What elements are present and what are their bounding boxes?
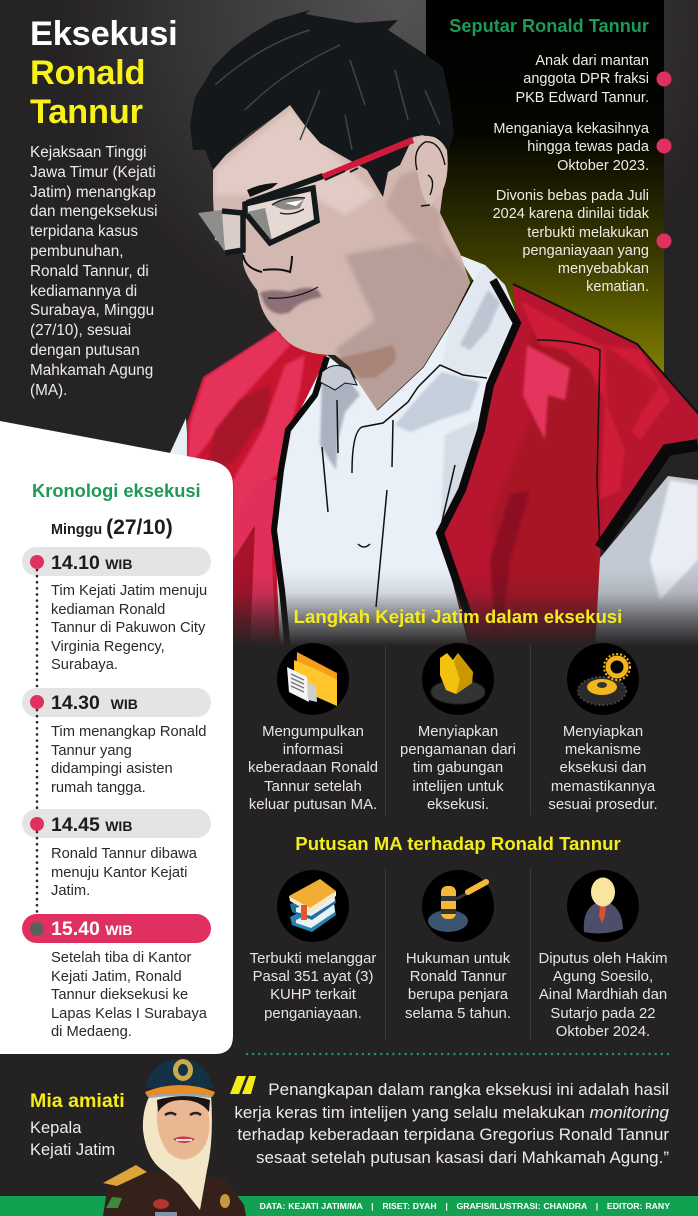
quote text: kerja keras tim intelijen yang selalu melakukan monitoring [234, 1103, 669, 1122]
text: langkah 1 [248, 724, 378, 813]
text: langkah 1: informasi [283, 742, 343, 758]
hijab [143, 1095, 212, 1210]
portrait: Ronald Tannur [170, 10, 698, 650]
timeline text 1: Virginia Regency, [51, 638, 165, 654]
intro text: terpidana kasus [30, 223, 138, 240]
timeline markers [30, 555, 44, 936]
background [0, 0, 698, 650]
text: langkah 2: tim gabungan [413, 760, 503, 776]
quote mark [230, 1076, 256, 1094]
text: putusan 3: Oktober 2024. [556, 1024, 650, 1040]
timeline text 3 [51, 846, 197, 899]
text: Seputar fact 2 [493, 121, 649, 174]
text: Seputar fact 1 [515, 53, 649, 106]
text: Seputar fact 3: penganiayaan yang [522, 243, 649, 259]
heading: Putusan MA: Putusan MA terhadap Ronald Tannur [295, 833, 621, 854]
text: Seputar fact 3 [493, 188, 649, 295]
icon: folder with documents [277, 643, 349, 715]
glasses [198, 140, 413, 253]
panel: kronologi card [0, 421, 233, 1054]
text: Seputar fact 2: Oktober 2023. [557, 158, 649, 174]
timeline text 4: Tannur dieksekusi ke [51, 987, 188, 1003]
text: Seputar fact 1: PKB Edward Tannur. [515, 90, 649, 106]
title: Ronald [30, 54, 145, 92]
neck and face [213, 105, 470, 410]
timeline text 1 [51, 583, 207, 673]
title [30, 15, 178, 131]
right jacket [440, 284, 698, 650]
intro text [30, 144, 158, 399]
timeline text 4: Kejati Jatim, Ronald [51, 968, 182, 984]
title: Tannur [30, 93, 143, 131]
text: putusan 2 [405, 951, 511, 1022]
quote text: Penangkapan dalam rangka eksekusi ini adalah hasil [268, 1080, 669, 1099]
text: langkah 2: pengamanan dari [400, 742, 516, 758]
speaker name: Mia amiati [30, 1090, 125, 1112]
cap [146, 1059, 213, 1088]
time: 14.30: 14.30 WIB [51, 692, 138, 714]
text: Seputar fact 3: kematian. [586, 279, 649, 295]
heading: Kronologi eksekusi: Kronologi eksekusi [32, 480, 201, 501]
uniform insignia [106, 1197, 122, 1208]
dots: Seputar bullets [656, 72, 672, 248]
footer credits: DATA: KEJATI JATIM/MA | RISET: DYAH | GRAFIS/ILUSTRASI: CHANDRA | EDITOR: RANY [260, 1201, 670, 1211]
speaker role: Kepala [30, 1119, 81, 1137]
timeline text 2 [51, 724, 206, 796]
timeline text 1: Surabaya. [51, 657, 118, 673]
intro text: kediamannya di [30, 283, 137, 300]
timeline text 1: Tannur di Pakuwon City [51, 620, 205, 636]
intro text: (27/10), sesuai [30, 322, 131, 339]
text: langkah 3: Menyiapkan [563, 724, 643, 740]
text: langkah 3: mekanisme [565, 742, 641, 758]
text: putusan 1: Terbukti melanggar [250, 951, 376, 967]
epaulette [103, 1165, 147, 1186]
timeline text 2: didampingi asisten [51, 761, 173, 777]
text: putusan 2: Hukuman untuk [406, 951, 510, 967]
text: putusan 2: selama 5 tahun. [405, 1006, 511, 1022]
text: putusan 3: Ainal Mardhiah dan [539, 987, 667, 1003]
eye and brow [247, 183, 278, 197]
timeline text 3: menuju Kantor Kejati [51, 864, 187, 880]
dotted divider [247, 1053, 672, 1055]
uniform [103, 1172, 246, 1216]
left jacket [180, 330, 327, 650]
intro text: pembunuhan, [30, 243, 124, 260]
timeline text 1: Tim Kejati Jatim menuju [51, 583, 207, 599]
text: langkah 2: intelijen untuk [412, 779, 504, 795]
text: Seputar fact 3: terbukti melakukan [527, 225, 649, 241]
shirt lines [322, 280, 487, 607]
timeline text 4: Lapas Kelas I Surabaya [51, 1006, 207, 1022]
timeline text 2: rumah tangga. [51, 780, 146, 796]
left white sleeve [170, 418, 190, 480]
time: 15.40: 15.40 WIB [51, 918, 132, 940]
date label: Minggu (27/10) [51, 516, 173, 539]
time: 14.45: 14.45 WIB [51, 814, 132, 836]
icon: stack of books [277, 870, 349, 942]
timeline text 4: di Medaeng. [51, 1024, 132, 1040]
speaker role [30, 1119, 115, 1159]
text: Seputar fact 3: menyebabkan [558, 261, 649, 277]
icon: gears [567, 643, 639, 715]
timeline text 4 [51, 950, 207, 1040]
text: langkah 1: Mengumpulkan [262, 724, 364, 740]
text: Seputar fact 1: anggota DPR fraksi [523, 71, 649, 87]
timeline text 1: kediaman Ronald [51, 602, 165, 618]
timeline text 2: Tannur yang [51, 742, 132, 758]
text: putusan 3: Agung Soesilo, [553, 969, 653, 985]
timeline text 4: Setelah tiba di Kantor [51, 950, 191, 966]
footer bar [0, 1196, 698, 1216]
fade of portrait into background [0, 570, 698, 646]
text: Seputar fact 3: Divonis bebas pada Juli [496, 188, 649, 204]
intro text: Kejaksaan Tinggi [30, 144, 147, 161]
text: putusan 3: Sutarjo pada 22 [550, 1006, 656, 1022]
hair [190, 10, 454, 197]
text: langkah 3: eksekusi dan [560, 760, 646, 776]
intro text: (MA). [30, 382, 67, 399]
quote text: sesaat setelah putusan kasasi dari Mahkamah Agung.” [256, 1148, 669, 1167]
panel: Seputar backdrop [426, 0, 664, 372]
text: putusan 1 [250, 951, 376, 1022]
text: langkah 1: Tannur setelah [264, 779, 362, 795]
lips and mouth [260, 288, 322, 314]
ear [413, 136, 448, 207]
text: Seputar fact 3: 2024 karena dinilai tidak [493, 206, 649, 222]
timeline text 3: Jatim. [51, 883, 90, 899]
intro text: dengan putusan [30, 342, 140, 359]
text: putusan 1: Pasal 351 ayat (3) [253, 969, 373, 985]
heading: Seputar Ronald Tannur: Seputar Ronald Tannur [449, 16, 649, 36]
timeline pills [22, 547, 211, 943]
icon: gavel [422, 870, 494, 942]
intro text: Jawa Timur (Kejati [30, 164, 156, 181]
timeline text 2: Tim menangkap Ronald [51, 724, 206, 740]
text: putusan 2: berupa penjara [408, 987, 508, 1003]
text: Seputar fact 1: Anak dari mantan [535, 53, 649, 69]
shirt [270, 254, 520, 650]
intro text: Jatim) menangkap [30, 184, 156, 201]
text: langkah 1: keberadaan Ronald [248, 760, 378, 776]
title: Eksekusi [30, 15, 178, 53]
column dividers [386, 645, 530, 1040]
heading: Langkah Kejati Jatim: Langkah Kejati Jatim dalam eksekusi [294, 606, 622, 627]
text: langkah 3: memastikannya [551, 779, 655, 795]
cap badge [173, 1059, 193, 1081]
text: putusan 1: KUHP terkait [270, 987, 356, 1003]
text: putusan 3: Diputus oleh Hakim [538, 951, 668, 967]
intro text: dan mengeksekusi [30, 203, 158, 220]
text: putusan 1: penganiayaan. [264, 1006, 362, 1022]
text: langkah 3: sesuai prosedur. [548, 797, 658, 813]
text: langkah 2: eksekusi. [427, 797, 489, 813]
timeline connector dots [36, 570, 38, 916]
intro text: Surabaya, Minggu [30, 302, 154, 319]
text: langkah 3 [548, 724, 658, 813]
face [157, 1100, 210, 1160]
text: Seputar fact 2: Menganiaya kekasihnya [493, 121, 649, 137]
timeline text 3: Ronald Tannur dibawa [51, 846, 197, 862]
text: putusan 3 [538, 951, 668, 1040]
text: langkah 2 [400, 724, 516, 813]
speaker role: Kejati Jatim [30, 1141, 115, 1159]
text: langkah 2: Menyiapkan [418, 724, 498, 740]
quote text [234, 1080, 669, 1167]
text: langkah 1: keluar putusan MA. [249, 797, 377, 813]
intro text: Ronald Tannur, di [30, 263, 149, 280]
text: Seputar fact 2: hingga tewas pada [527, 139, 649, 155]
intro text: Mahkamah Agung [30, 362, 153, 379]
right sleeve [595, 476, 698, 650]
quote text: terhadap keberadaan terpidana Gregorius Ronald Tannur [237, 1125, 669, 1144]
icon: shield [422, 643, 494, 715]
text: putusan 2: Ronald Tannur [410, 969, 506, 985]
portrait: Mia Amiati [103, 1059, 246, 1216]
icon: judge portrait [567, 870, 639, 942]
time: 14.10: 14.10 WIB [51, 552, 132, 574]
